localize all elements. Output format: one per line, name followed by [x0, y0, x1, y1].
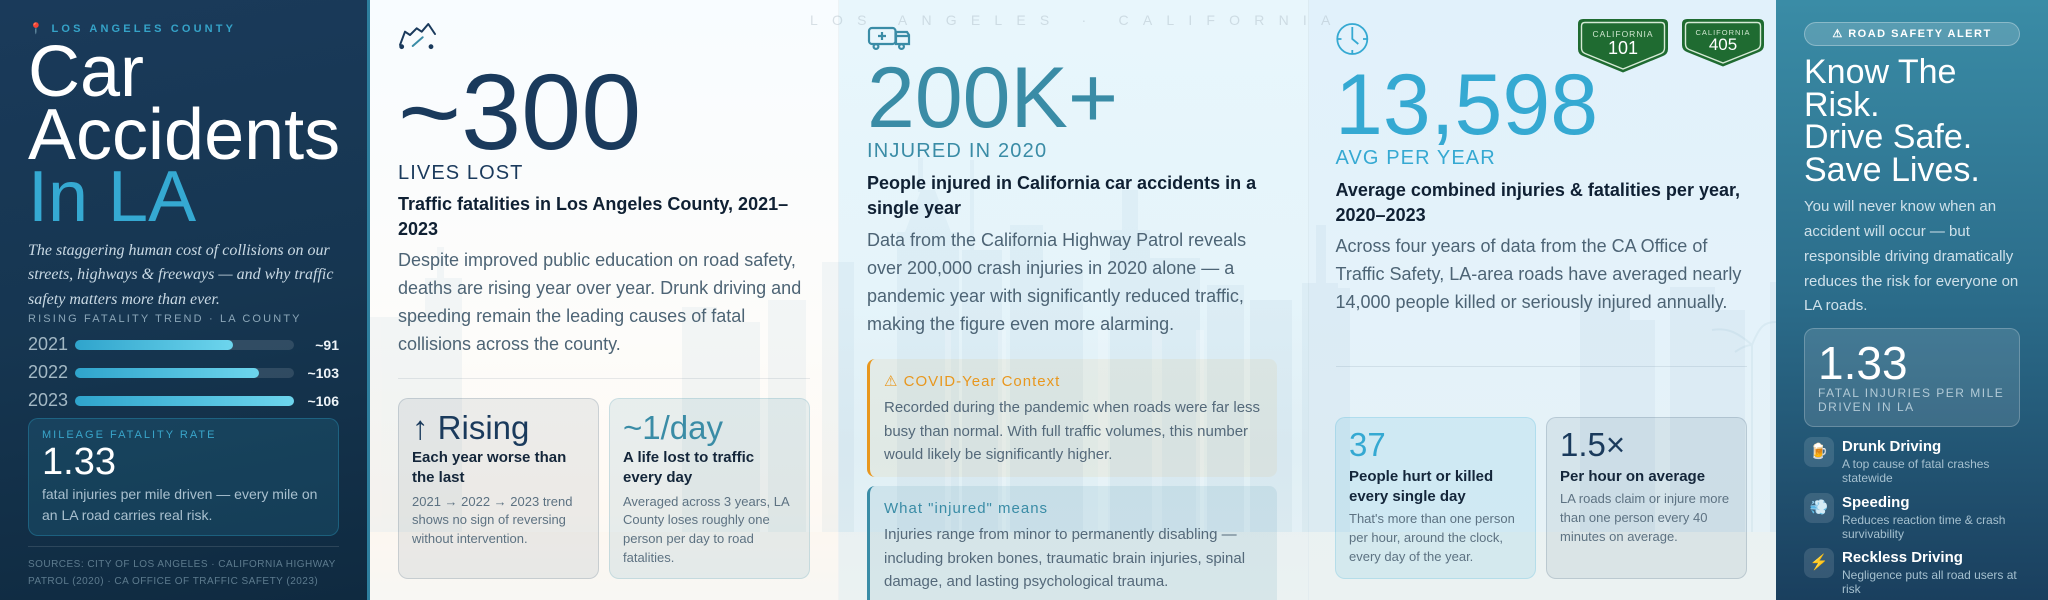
- icon: highway sign 101: 101: [1608, 38, 1638, 58]
- card: rising: without intervention.: [412, 531, 528, 546]
- card: rising: the last: [412, 469, 465, 486]
- body text: Data from the California Highway Patrol reveals: [867, 230, 1246, 250]
- heading: Risk.: [1804, 86, 1880, 124]
- risk item: drunk driving: Drunk Driving: [1842, 438, 1941, 455]
- body text: deaths are rising year over year. Drunk driving and: [398, 278, 801, 298]
- body text: accident will occur — but: [1804, 223, 1970, 240]
- body text: responsible driving dramatically: [1804, 248, 2013, 265]
- heading: [398, 194, 788, 239]
- callout: mileage fatality rate: an LA road carries real risk.: [42, 507, 212, 523]
- body text: 14,000 people killed or seriously injured annually.: [1336, 292, 1727, 312]
- sources: PATROL (2020) · CA OFFICE OF TRAFFIC SAFETY (2023): [28, 576, 318, 587]
- card: rising: Each year worse than: [412, 449, 566, 466]
- icon: highway sign 405: CALIFORNIA: [1695, 28, 1751, 37]
- heading: Know The: [1804, 53, 1956, 91]
- card: rising: ↑ Rising: [412, 408, 529, 446]
- body text: Traffic Safety, LA-area roads have averaged nearly: [1336, 264, 1741, 284]
- bar chart: fatality trend: ~103: [307, 365, 339, 381]
- main title: [28, 32, 340, 237]
- skyline illustration: [370, 158, 1776, 532]
- big number: 200K+: [867, 50, 1118, 146]
- card: per day: [1335, 417, 1536, 579]
- heading: [867, 172, 1256, 218]
- card: per hour: than one person every 40: [1560, 510, 1707, 525]
- icon: highway sign 101: CALIFORNIA: [1592, 29, 1654, 39]
- card: rising: shows no sign of reversing: [412, 512, 566, 527]
- card: one per day: County loses roughly one: [623, 512, 770, 527]
- bar chart: fatality trend: [28, 334, 339, 410]
- card: one per day: Averaged across 3 years, LA: [623, 494, 790, 508]
- body text: [1804, 198, 2018, 314]
- location eyebrow: 📍: [29, 23, 43, 35]
- card: per day: per hour, around the clock,: [1349, 530, 1503, 545]
- stat label: LIVES LOST: [398, 162, 524, 184]
- bar chart: fatality trend: 2022: [28, 362, 68, 382]
- subtitle: streets, highways & freeways — and why traffic: [28, 266, 333, 283]
- callout: mileage fatality rate: [28, 418, 339, 536]
- heading: 2023: [398, 219, 438, 239]
- risk item: drunk driving: statewide: [1842, 471, 1893, 485]
- card: per hour: [1546, 417, 1747, 579]
- card: per day: every day of the year.: [1349, 549, 1473, 564]
- bar chart: fatality trend: 2021: [28, 334, 68, 354]
- risk item: reckless driving: Reckless Driving: [1842, 549, 1963, 566]
- heading: Traffic fatalities in Los Angeles County, 2021–: [398, 194, 788, 214]
- card: per day: 37: [1349, 426, 1386, 463]
- subtitle: The staggering human cost of collisions on our: [28, 242, 330, 258]
- callout: injured definition: Injuries range from minor to permanently disabling —: [884, 526, 1237, 543]
- watermark text: LOS ANGELES · CALIFORNIA: [810, 12, 1345, 28]
- body text: reduces the risk for everyone on: [1804, 273, 2018, 290]
- card: rising: 2021 → 2022 → 2023 trend: [412, 494, 572, 508]
- stat box: DRIVEN IN LA: [1818, 400, 1915, 414]
- alert badge: [1804, 22, 2020, 46]
- body text: speeding remain the leading causes of fatal: [398, 306, 745, 326]
- heading: Save Lives.: [1804, 151, 1980, 189]
- risk item: reckless driving: [1804, 548, 2017, 596]
- card: one per day: [609, 398, 810, 579]
- heading: Average combined injuries & fatalities per year,: [1336, 180, 1740, 200]
- location eyebrow: LOS ANGELES COUNTY: [52, 23, 236, 35]
- callout: mileage fatality rate: 1.33: [42, 441, 116, 483]
- callout: covid context: Recorded during the pandemic when roads were far less: [884, 399, 1260, 416]
- body text: LA roads.: [1804, 297, 1867, 314]
- panel: annual average: [1335, 23, 1747, 579]
- icon: ambulance: [868, 26, 910, 50]
- callout: covid context: would likely be significantly higher.: [884, 446, 1112, 463]
- callout: covid context: ⚠ COVID-Year Context: [884, 373, 1060, 390]
- heading: [1804, 53, 1980, 189]
- trend label: RISING FATALITY TREND · LA COUNTY: [28, 313, 302, 325]
- card: rising: [398, 398, 599, 579]
- risk item: reckless driving: ⚡: [1810, 554, 1828, 571]
- heading: [1336, 180, 1740, 225]
- callout: injured definition: damage, and lasting psychological trauma.: [884, 573, 1168, 590]
- card: per hour: 1.5×: [1560, 426, 1625, 463]
- card: one per day: A life lost to traffic: [623, 449, 754, 466]
- body text: [398, 250, 801, 354]
- heading: People injured in California car accidents in a: [867, 172, 1256, 192]
- stat label: INJURED IN 2020: [867, 140, 1047, 162]
- callout: injured definition: What "injured" means: [884, 500, 1048, 517]
- subtitle: safety matters more than ever.: [28, 291, 220, 308]
- body text: pandemic year with significantly reduced traffic,: [867, 286, 1244, 306]
- stat box: [1804, 328, 2020, 427]
- card: one per day: fatalities.: [623, 550, 674, 565]
- callout: injured definition: [867, 486, 1277, 600]
- icon: clock: [1336, 23, 1368, 55]
- risk item: drunk driving: A top cause of fatal crashes: [1842, 457, 1989, 471]
- risk item: speeding: [1804, 493, 2005, 541]
- panel: lives lost: [398, 23, 810, 579]
- card: one per day: ~1/day: [623, 408, 723, 446]
- icon: crash trend: [399, 23, 436, 50]
- callout: mileage fatality rate: MILEAGE FATALITY RATE: [42, 429, 216, 441]
- bar chart: fatality trend: ~91: [315, 337, 339, 353]
- card: per day: That's more than one person: [1349, 511, 1515, 526]
- main title: Accidents: [28, 95, 340, 175]
- sources: SOURCES: CITY OF LOS ANGELES · CALIFORNIA HIGHWAY: [28, 559, 336, 570]
- callout: covid context: [867, 359, 1277, 477]
- bar chart: fatality trend: ~106: [307, 393, 339, 409]
- risk item: reckless driving: Negligence puts all road users at: [1842, 568, 2017, 582]
- icon: highway sign 101: [1578, 19, 1668, 72]
- card: per day: People hurt or killed: [1349, 468, 1493, 484]
- stat label: AVG PER YEAR: [1336, 147, 1496, 169]
- icon: highway sign 405: 405: [1709, 35, 1737, 54]
- card: per hour: minutes on average.: [1560, 529, 1678, 544]
- body text: collisions across the county.: [398, 334, 621, 354]
- card: one per day: every day: [623, 469, 692, 486]
- alert badge: ⚠ ROAD SAFETY ALERT: [1832, 28, 1992, 40]
- main title: In LA: [28, 157, 196, 237]
- body text: making the figure even more alarming.: [867, 314, 1174, 334]
- big number: ~300: [398, 51, 641, 172]
- body text: Across four years of data from the CA Office of: [1336, 236, 1707, 256]
- big number: 13,598: [1335, 57, 1598, 153]
- risk item: drunk driving: [1804, 437, 1989, 485]
- panel: road safety alert: [1776, 0, 2048, 600]
- body text: over 200,000 crash injuries in 2020 alone — a: [867, 258, 1234, 278]
- panel: title sidebar: [0, 0, 370, 600]
- card: per hour: LA roads claim or injure more: [1560, 491, 1729, 506]
- heading: Drive Safe.: [1804, 118, 1972, 156]
- body text: [867, 230, 1246, 334]
- card: per day: every single day: [1349, 488, 1466, 504]
- panel: injured: [867, 26, 1277, 600]
- stat box: 1.33: [1818, 336, 1908, 388]
- body text: [1336, 236, 1742, 312]
- risk item: speeding: 💨: [1810, 499, 1828, 516]
- risk item: speeding: Speeding: [1842, 494, 1910, 511]
- risk item: speeding: survivability: [1842, 527, 1904, 541]
- callout: injured definition: including broken bones, traumatic brain injuries, spinal: [884, 550, 1245, 567]
- icon: highway sign 405: [1682, 19, 1764, 66]
- sources: [28, 559, 336, 587]
- callout: mileage fatality rate: fatal injuries per mile driven — every mile on: [42, 486, 317, 502]
- stat box: FATAL INJURIES PER MILE: [1818, 386, 2004, 400]
- card: one per day: person per day to road: [623, 531, 754, 546]
- body text: You will never know when an: [1804, 198, 1996, 215]
- risk item: speeding: Reduces reaction time & crash: [1842, 513, 2005, 527]
- body text: Despite improved public education on road safety,: [398, 250, 796, 270]
- card: per hour: Per hour on average: [1560, 468, 1705, 484]
- risk item: reckless driving: risk: [1842, 582, 1861, 596]
- bar chart: fatality trend: 2023: [28, 390, 68, 410]
- heading: single year: [867, 198, 961, 218]
- risk item: drunk driving: 🍺: [1810, 443, 1828, 460]
- callout: covid context: busy than normal. With full traffic volumes, this number: [884, 423, 1248, 440]
- subtitle: [28, 242, 334, 308]
- main title: Car: [28, 32, 144, 112]
- heading: 2020–2023: [1336, 205, 1426, 225]
